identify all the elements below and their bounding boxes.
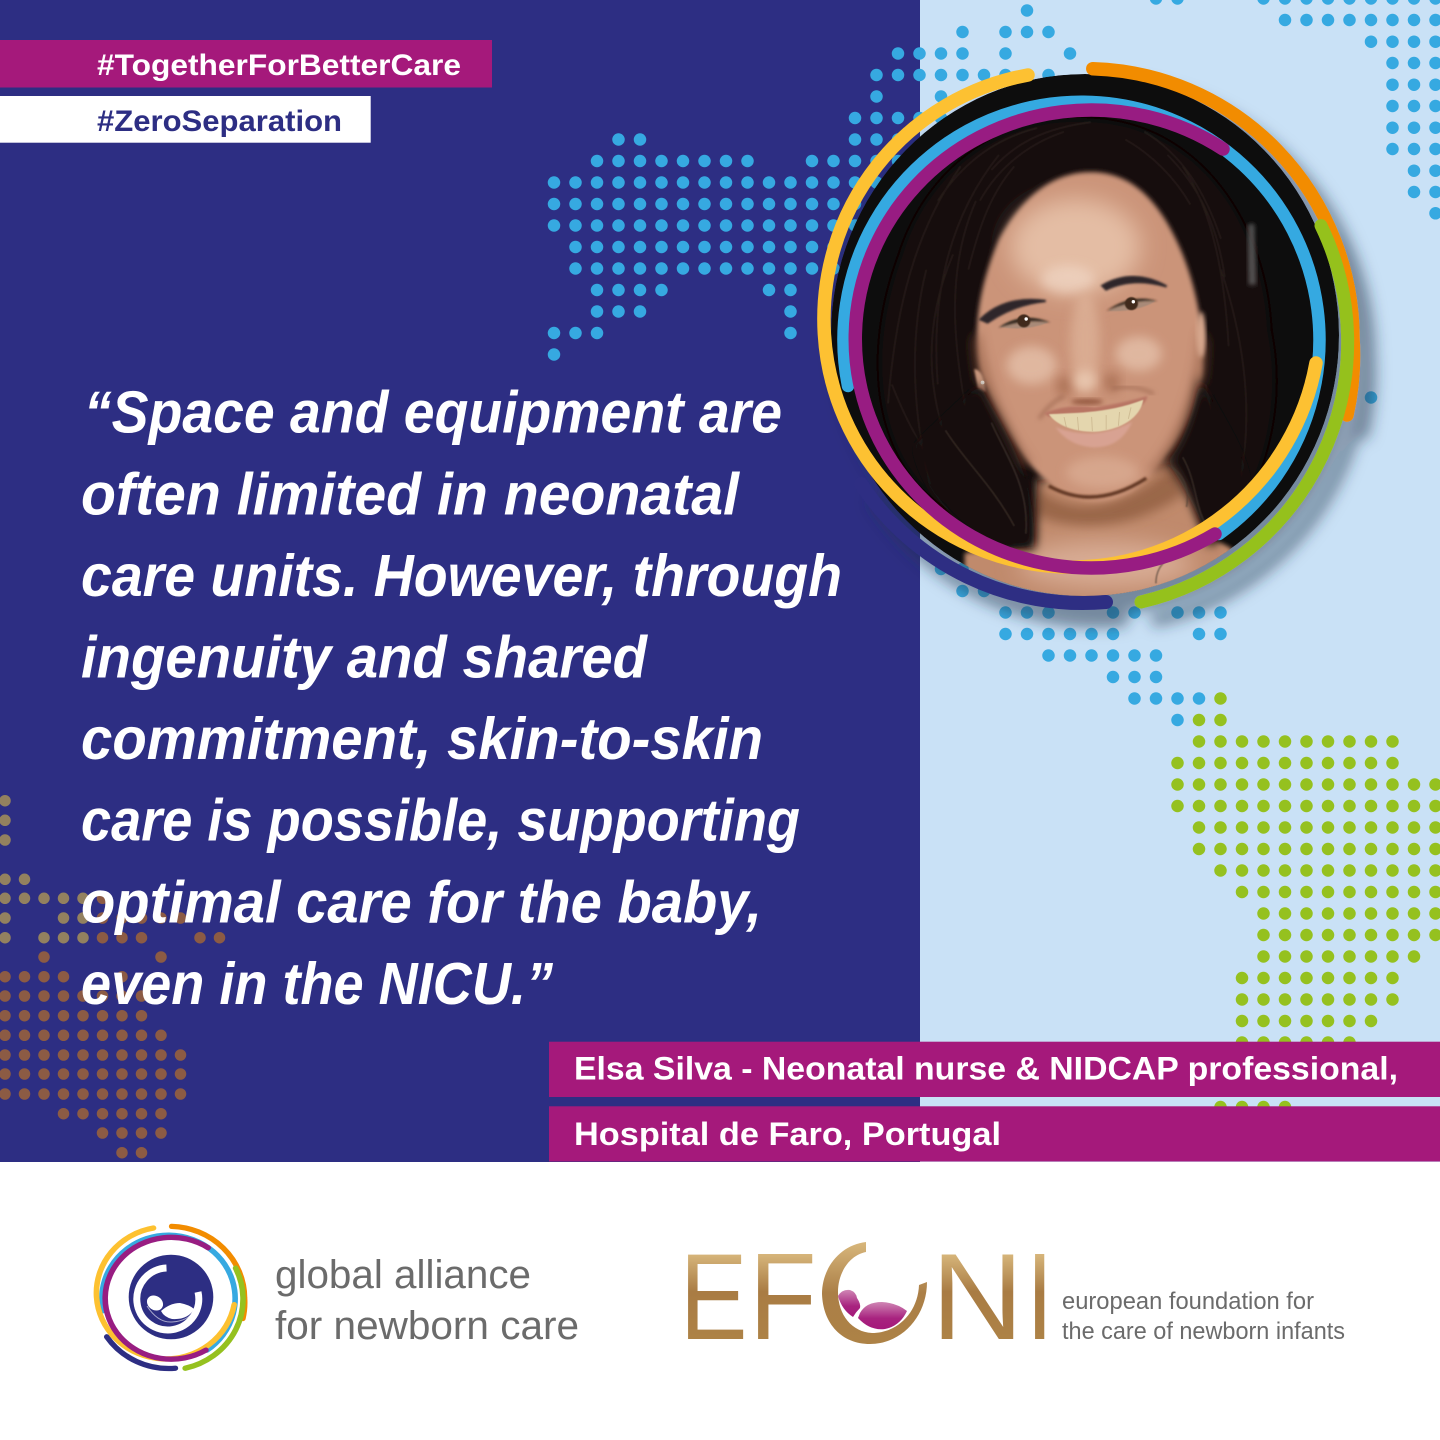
ring: blue xyxy=(843,102,1319,534)
attribution banner xyxy=(549,1042,1440,1162)
quote text: commitment, skin-to-skin xyxy=(81,706,763,772)
eyes and brows xyxy=(981,300,1046,322)
dotted map: africa in brown xyxy=(5,801,220,1153)
ring: navy xyxy=(861,484,1106,603)
ring: orange xyxy=(1093,69,1354,415)
quote text: ingenuity and shared xyxy=(81,624,649,690)
ring: yellow xyxy=(824,75,1316,567)
quote text: optimal care for the baby, xyxy=(81,869,762,935)
hashtag banner: TogetherForBetterCare xyxy=(0,40,492,88)
logo wordmark: global alliance xyxy=(275,1253,531,1297)
icon: baby xyxy=(838,1290,907,1329)
logo: global alliance for newborn care xyxy=(96,1226,579,1368)
logo letters xyxy=(680,1227,1053,1366)
quote text: often limited in neonatal xyxy=(81,461,741,527)
mouth xyxy=(1044,396,1147,417)
hashtag banner: ZeroSeparation: #ZeroSeparation xyxy=(97,105,342,138)
front hair locks xyxy=(915,384,1034,549)
hashtag banner: TogetherForBetterCare: #TogetherForBetterCare xyxy=(97,49,461,82)
dotted map: north america and asia in blue xyxy=(554,0,1436,720)
ring: green xyxy=(1141,226,1348,602)
portrait photo xyxy=(831,74,1339,606)
quote text: “Space and equipment are xyxy=(84,380,782,446)
logo: EFCNI xyxy=(680,1227,1345,1366)
logo letters: F xyxy=(749,1228,817,1365)
quote text: care units. However, through xyxy=(81,543,842,609)
icon: mother arc xyxy=(822,1242,927,1344)
navy panel xyxy=(0,0,920,1162)
hashtag banner: ZeroSeparation xyxy=(0,96,371,143)
logo letters: N xyxy=(931,1227,1024,1365)
logo tagline: european foundation for xyxy=(1062,1288,1314,1315)
logo: global alliance for newborn care: for newborn care xyxy=(275,1304,579,1348)
attribution banner: Elsa Silva - Neonatal nurse & NIDCAP professional, xyxy=(574,1050,1398,1086)
light blue panel xyxy=(920,0,1440,1162)
ring: purple xyxy=(855,110,1223,568)
quote text: care is possible, supporting xyxy=(81,788,800,854)
icon: mother and baby disc xyxy=(129,1255,213,1339)
quote text: even in the NICU.” xyxy=(81,951,553,1017)
logo letters: E xyxy=(680,1228,747,1365)
face base xyxy=(977,172,1203,501)
icon: alliance rings xyxy=(96,1226,245,1368)
attribution banner: Hospital de Faro, Portugal xyxy=(574,1116,1001,1152)
quote text xyxy=(81,380,842,1017)
logo letters: I xyxy=(1026,1227,1053,1366)
dotted map: south america in green xyxy=(1178,698,1436,1107)
portrait with coloured rings xyxy=(824,69,1354,606)
logo: EFCNI: the care of newborn infants xyxy=(1062,1318,1345,1345)
